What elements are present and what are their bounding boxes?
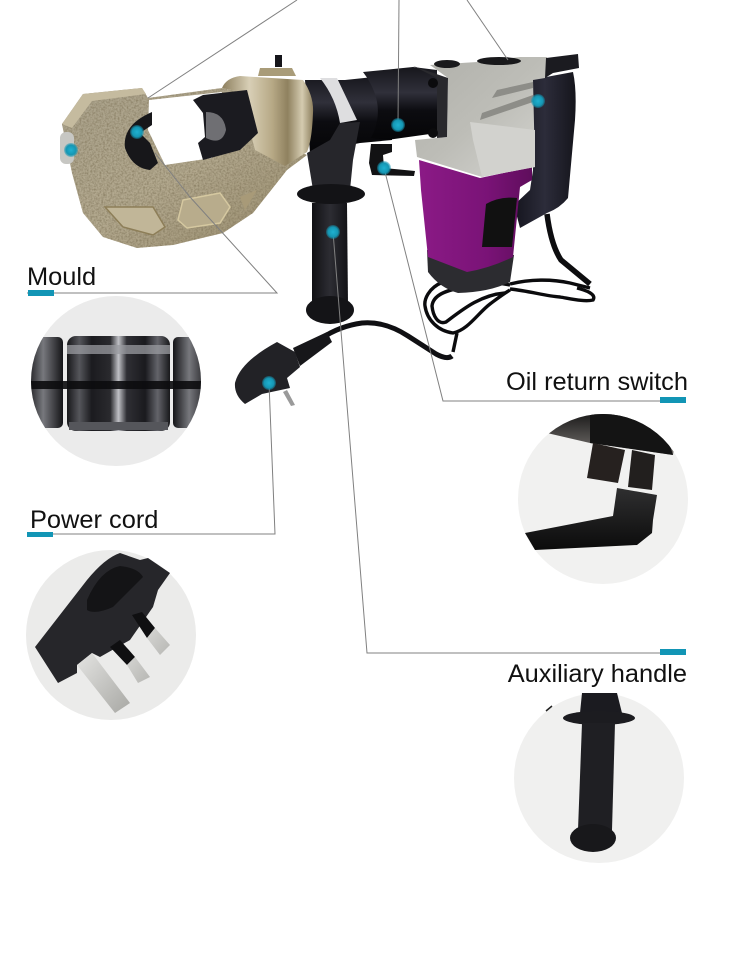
hydraulic cylinder — [222, 76, 313, 166]
crimper jaw — [62, 88, 307, 248]
motor base — [427, 250, 514, 293]
heading: Power cord: Power cord — [30, 506, 158, 534]
main tool: hydraulic crimper — [60, 54, 594, 406]
left crimp die — [125, 112, 158, 170]
power cable to plug — [322, 323, 452, 358]
hydraulic barrel — [305, 75, 392, 153]
right crimp die — [193, 90, 258, 160]
panel: Auxiliary handle detail — [514, 693, 684, 863]
heading: Oil return switch: Oil return switch — [506, 368, 688, 396]
plug on cord — [235, 332, 332, 406]
purple motor housing — [419, 160, 532, 272]
silver gearbox — [415, 57, 547, 177]
accent bar: Oil return switch — [660, 397, 686, 403]
accent bar: Mould — [28, 290, 54, 296]
jaw pockets — [105, 207, 165, 235]
callout dots — [64, 94, 545, 390]
panel: Mould detail — [27, 296, 209, 466]
top handle cap — [545, 54, 579, 78]
oil return lever — [369, 144, 415, 176]
front handle neck — [307, 122, 360, 190]
accent bar: Power cord — [27, 532, 53, 537]
panel: Power cord detail — [26, 550, 196, 720]
heading: Auxiliary handle: Auxiliary handle — [508, 660, 687, 688]
panel: Oil return switch detail — [518, 410, 688, 584]
coiled cord — [425, 280, 594, 352]
rear power cord — [547, 214, 590, 284]
accent bar: Auxiliary handle — [660, 649, 686, 655]
side latch — [60, 132, 74, 164]
rear handle — [514, 72, 576, 228]
product label — [482, 198, 517, 247]
leader lines — [27, 0, 686, 653]
silver barrel band — [320, 78, 357, 123]
auxiliary handle — [312, 203, 348, 305]
heading: Mould: Mould — [27, 263, 96, 291]
jaw opening — [148, 92, 222, 165]
